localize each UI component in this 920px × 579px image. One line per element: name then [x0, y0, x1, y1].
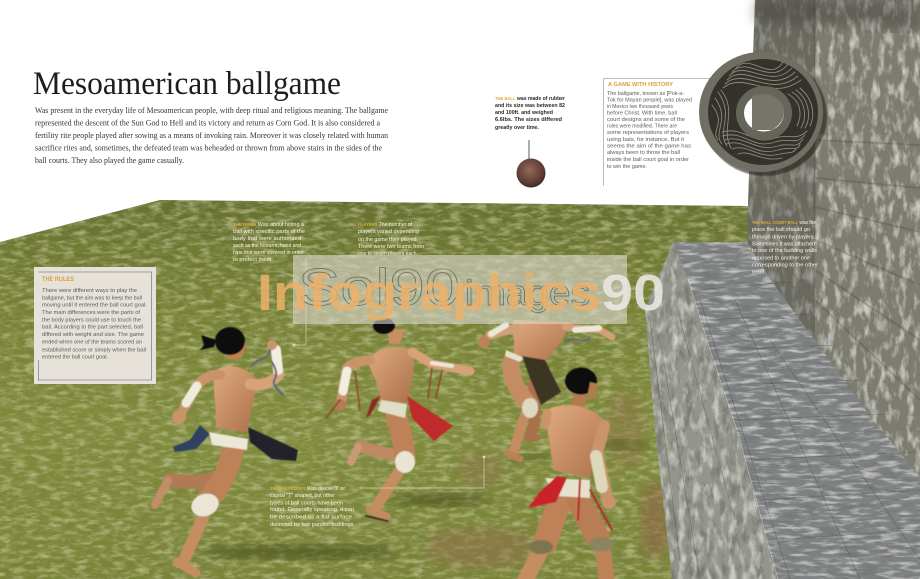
panel: a game with history: to win the game. — [607, 164, 647, 170]
panel: the rules: the body players could use to touch the — [42, 317, 141, 323]
text: the ball: and its size was between 82 — [495, 103, 565, 109]
text: the ball court: delimited by two parallel buildings. — [270, 522, 355, 528]
text: the game — [233, 222, 305, 263]
panel: the rules: There were different ways to play the — [42, 288, 137, 294]
panel: a game with history: always been to throw the ball — [607, 150, 680, 156]
text: the ball: and 100ft. and weighed — [495, 110, 553, 116]
panel: a game with history: before Christ. With time, ball — [607, 110, 677, 116]
text: the ball court — [270, 486, 355, 528]
player 2: running with red cloth — [326, 318, 470, 521]
watermark: panel with ghost logo and Infographics90: Infographics 90 — [257, 264, 665, 321]
platform top surface — [673, 242, 920, 579]
text: players: one to seven players each. — [358, 251, 418, 257]
text: the ball court: found. Generally speaking, it can — [270, 507, 354, 513]
text: the ball court ball: THE BALL COURT BALL was the — [752, 220, 816, 226]
panel: the rules: The main differences were the parts of — [42, 310, 141, 316]
panel: a game with history: seems the aim of the game has — [607, 144, 691, 150]
panel: a game with history — [604, 78, 710, 186]
panel: a game with history: using bats, for instance. But it — [607, 137, 685, 143]
text: players: players varied depending — [358, 229, 419, 235]
stone platform — [645, 242, 920, 579]
panel: the rules: moving until it entered the ball court goal. — [42, 303, 147, 309]
panel: a game with history: inside the ball court goal in order — [607, 157, 689, 163]
panel: the rules: differed with weight and size. The game — [42, 332, 144, 338]
text: players: PLAYERS The number of — [358, 222, 412, 228]
text: the ball court ball: opposed to another one — [752, 256, 810, 262]
panel: the rules: entered the ball court goal. — [42, 355, 108, 361]
intro text: Was present in the everyday life of Mesoamerican people, with deep ritual and religious meaning. The ballgame — [35, 105, 388, 115]
panel: a game with history: The ballgame, known as [Pok-a- — [607, 91, 684, 97]
text: the game: body that were authorized — [233, 236, 301, 242]
player 1: running left with blue belt — [155, 327, 298, 573]
panel: a game with history: some representations of players — [607, 130, 689, 136]
icon: stone ring goal — [699, 52, 827, 176]
text: the game: hips that were covered in order — [233, 250, 304, 256]
text: the ball court: be described as a flat surface — [270, 515, 352, 521]
panel: a game with history: court designs and some of the — [607, 117, 685, 123]
text: the ball court ball: team. — [752, 270, 766, 276]
text: the ball court: types of ball courts have been — [270, 500, 343, 506]
text: the ball court ball — [752, 220, 818, 276]
icon: rubber ball on a line — [516, 140, 546, 188]
text: the ball: THE BALL was made of rubber — [495, 96, 566, 102]
text: the ball court: capital "T" shaped, but other — [270, 493, 335, 499]
panel: the rules: ended when one of the teams scored an — [42, 340, 142, 346]
text: the game: ball with specific parts of the — [233, 229, 305, 235]
panel: a game with history: Tok for Mayan people], was played — [607, 98, 692, 104]
panel: the rules: ball. According to the part selected, ball — [42, 325, 143, 331]
text: the ball court ball: through driven by players. — [752, 234, 815, 240]
text: the ball court ball: corresponding to the other — [752, 262, 818, 268]
panel: the rules: established score or simply when the ball — [42, 347, 146, 353]
platform side face — [645, 242, 777, 579]
watermark: panel with ghost logo and Infographics90: images — [465, 272, 590, 313]
text: the ball court ball: place the ball should go — [752, 227, 810, 233]
panel: a game with history: in Mexico two thousand years — [607, 104, 673, 110]
intro text — [35, 105, 389, 165]
text: the ball: greatly over time. — [495, 125, 539, 131]
text: the ball: 6.6lbs. The sizes differed — [495, 117, 562, 123]
player 4: foreground with red cloth — [523, 368, 616, 579]
panel: a game with history: rules were modified. There are — [607, 124, 677, 130]
text: the game: to protect them. — [233, 257, 273, 263]
text: the ball court ball: Sometimes it was attached — [752, 242, 815, 248]
leader lines — [293, 258, 485, 488]
intro text: fertility rite people played after sowing as a means of invoking rain. Moreover it was closely related with human — [35, 130, 389, 140]
stone wall — [745, 0, 920, 579]
text: players: on the game they played. — [358, 237, 418, 243]
text: the game: such as the forearm, hand and — [233, 243, 301, 249]
text: the ball court ball: to one of the building walls — [752, 248, 817, 254]
text: the ball court: THE BALL COURT Was double "I" or — [270, 486, 345, 492]
text: players — [358, 222, 425, 257]
intro text: represented the descent of the Sun God to Hell and its victory and return as Corn God. It is also considered a — [35, 118, 380, 128]
player 3: background player — [478, 320, 612, 459]
text: the game: THE GAME Was about hitting a — [233, 222, 304, 228]
intro text: sacrifice rites and, sometimes, the defeated team was beheaded or thrown from above stairs in the sides of the — [35, 142, 382, 152]
panel: the rules — [34, 267, 156, 384]
watermark: panel with ghost logo and Infographics90: Sol90 — [298, 259, 460, 317]
grass field — [0, 200, 760, 579]
intro text: ball courts. They also played the game casually. — [35, 155, 184, 165]
panel: the rules: THE RULES — [42, 276, 75, 283]
text: players: There were two teams from — [358, 244, 425, 250]
panel: the rules: ballgame, but the aim was to keep the ball — [42, 295, 142, 301]
panel: a game with history: A GAME WITH HISTORY — [608, 82, 673, 88]
title: Mesoamerican ballgame — [33, 66, 341, 102]
text: the ball — [495, 96, 566, 131]
